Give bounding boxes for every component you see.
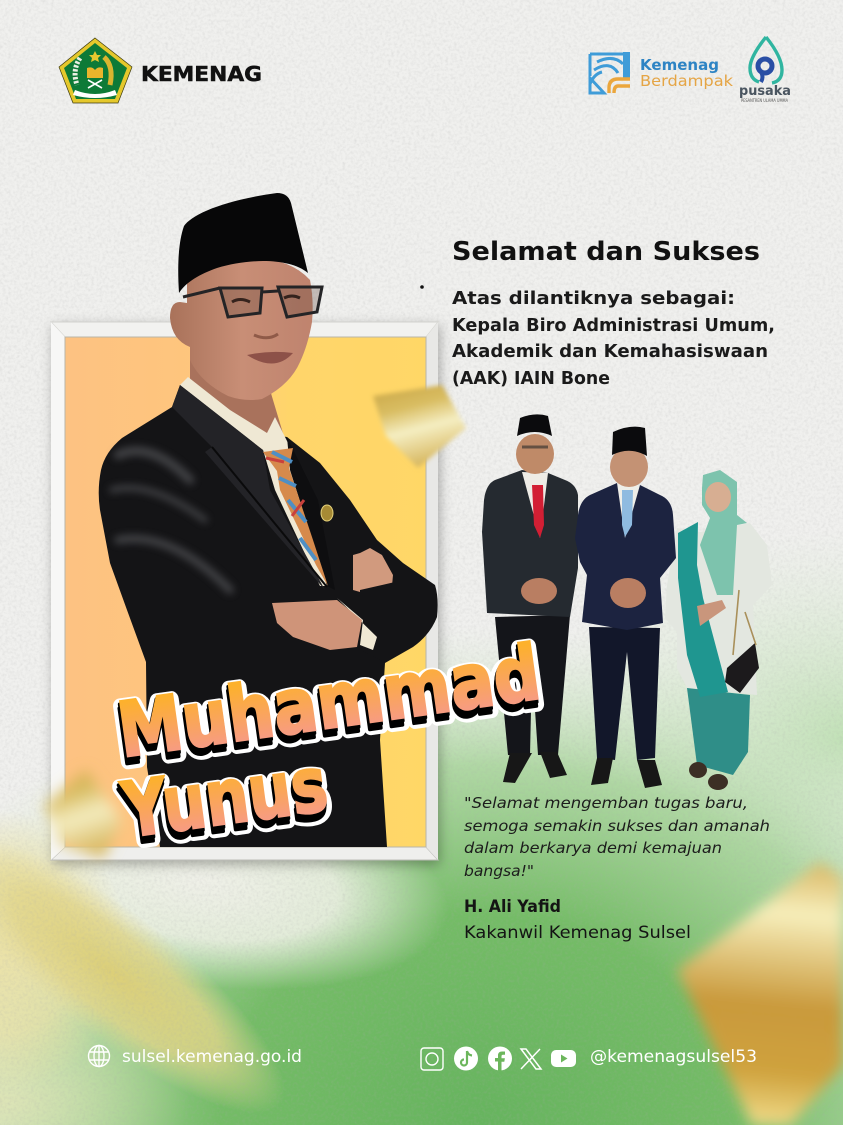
icon: X (521, 1049, 541, 1069)
appointment text: Kepala Biro Administrasi Umum, (452, 316, 775, 336)
logo: Kemenag Berdampak: Kemenag (640, 56, 719, 74)
icon: facebook (488, 1046, 512, 1071)
figure: man in red tie, left (482, 414, 578, 783)
peci (178, 193, 308, 293)
speaker name and role (464, 897, 691, 943)
name line: Yunus: Yunus (117, 739, 333, 855)
jacket sheen (112, 451, 230, 590)
lapel pin (321, 505, 333, 521)
speaker name and role: Kakanwil Kemenag Sulsel (464, 923, 691, 943)
icon: globe (88, 1046, 110, 1066)
appointment text: Atas dilantiknya sebagai: (452, 289, 735, 309)
social handle: @kemenagsulsel53 (590, 1047, 757, 1066)
crossed arm fingers (353, 548, 393, 592)
quote from Kakanwil: bangsa!" (464, 862, 534, 880)
appointment text (452, 289, 775, 389)
logo: Kemenag pentagon emblem (59, 38, 132, 103)
right lapel (287, 437, 335, 590)
forearm jacket under hand (360, 582, 395, 662)
logo wordmark: KEMENAG (141, 62, 262, 86)
gold ribbon at frame bottom left (44, 770, 122, 858)
suit jacket (99, 385, 438, 847)
group photo: three standing figures (482, 414, 772, 790)
glasses (183, 287, 322, 317)
icon: youtube (551, 1050, 576, 1067)
quote from Kakanwil (464, 794, 770, 880)
icon: tiktok (454, 1046, 478, 1070)
name line: Muhammad: Muhammad (112, 633, 545, 780)
head and ear (170, 258, 313, 400)
icon: instagram (421, 1048, 443, 1070)
name line: Yunus: Yunus (116, 744, 332, 860)
name title: Muhammad Yunus (110, 628, 546, 862)
shirt cuff (337, 598, 377, 650)
gold ribbon bottom right corner (677, 862, 843, 1125)
gold ribbon over frame top right (373, 385, 466, 468)
logo: pusaka (739, 37, 791, 104)
name line: Yunus: Yunus (116, 746, 332, 862)
main portrait: man with peci and black suit (99, 193, 438, 847)
hand (272, 600, 362, 650)
nose and mouth (254, 334, 278, 338)
dot (420, 285, 424, 289)
photo frame with orange-yellow backdrop (51, 322, 438, 860)
quote from Kakanwil: dalam berkarya demi kemajuan (464, 839, 722, 857)
heading: Selamat dan Sukses: Selamat dan Sukses (452, 237, 760, 267)
logo: Kemenag Berdampak: Berdampak (640, 72, 733, 90)
appointment text: (AAK) IAIN Bone (452, 369, 610, 389)
name line: Muhammad: Muhammad (112, 628, 545, 775)
lapel (172, 385, 325, 590)
speaker name and role: H. Ali Yafid (464, 897, 561, 917)
quote from Kakanwil: "Selamat mengemban tugas baru, (464, 794, 748, 812)
name line: Yunus: Yunus (116, 742, 332, 858)
quote from Kakanwil: semoga semakin sukses dan amanah (464, 817, 770, 835)
logo: pusaka: PESANTREN ULAMA UMMA (741, 98, 789, 104)
neck (190, 350, 285, 450)
figure: woman in teal hijab (665, 470, 772, 790)
website address: sulsel.kemenag.go.id (122, 1047, 302, 1067)
eyes (232, 296, 300, 302)
figure: man in navy suit, centre (575, 427, 676, 788)
name line: Muhammad: Muhammad (111, 635, 544, 782)
batik tie (263, 448, 328, 586)
shirt collar (180, 377, 327, 586)
logo: pusaka: pusaka (739, 83, 791, 99)
name line: Muhammad: Muhammad (112, 631, 545, 778)
logo: Kemenag Berdampak (590, 52, 733, 93)
appointment text: Akademik dan Kemahasiswaan (452, 342, 768, 362)
